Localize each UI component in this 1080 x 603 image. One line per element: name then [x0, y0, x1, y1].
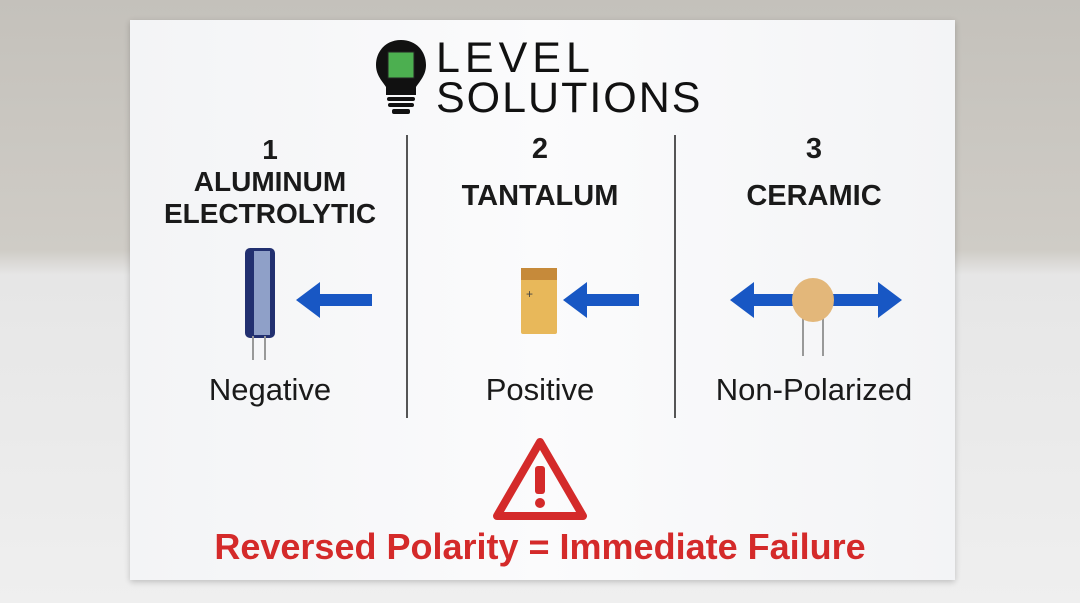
column 3: CERAMIC: [746, 180, 882, 212]
icon: electrolytic capacitor: [245, 248, 275, 360]
label: Non-Polarized: [716, 372, 912, 407]
heading 1: ELECTROLYTIC: [164, 198, 376, 229]
warning text: Reversed Polarity = Immediate Failure: [214, 526, 866, 567]
heading 1: ALUMINUM: [194, 166, 346, 197]
arrow double: [730, 282, 902, 318]
arrow left: [563, 282, 639, 318]
label: Negative: [209, 372, 331, 407]
icon: ceramic capacitor: [792, 278, 834, 356]
logo text: SOLUTIONS: [436, 74, 702, 122]
heading 1: 1: [262, 134, 278, 165]
icon: warning triangle: [493, 438, 587, 520]
column 2: [462, 133, 639, 407]
column 2: TANTALUM: [462, 180, 618, 212]
arrow left: [296, 282, 372, 318]
heading 1: [164, 134, 376, 229]
board: [130, 20, 955, 580]
logo text: LEVEL: [436, 34, 595, 82]
heading 3: 3: [806, 133, 822, 165]
icon: bulb: [376, 40, 426, 114]
label: Positive: [486, 372, 594, 407]
column 3: [716, 133, 912, 407]
icon: tantalum capacitor: +: [526, 287, 533, 301]
logo: [376, 34, 702, 122]
logo text: [436, 34, 702, 122]
heading 2: 2: [532, 133, 548, 165]
column 1: [164, 134, 376, 407]
icon: tantalum capacitor: [521, 268, 557, 334]
